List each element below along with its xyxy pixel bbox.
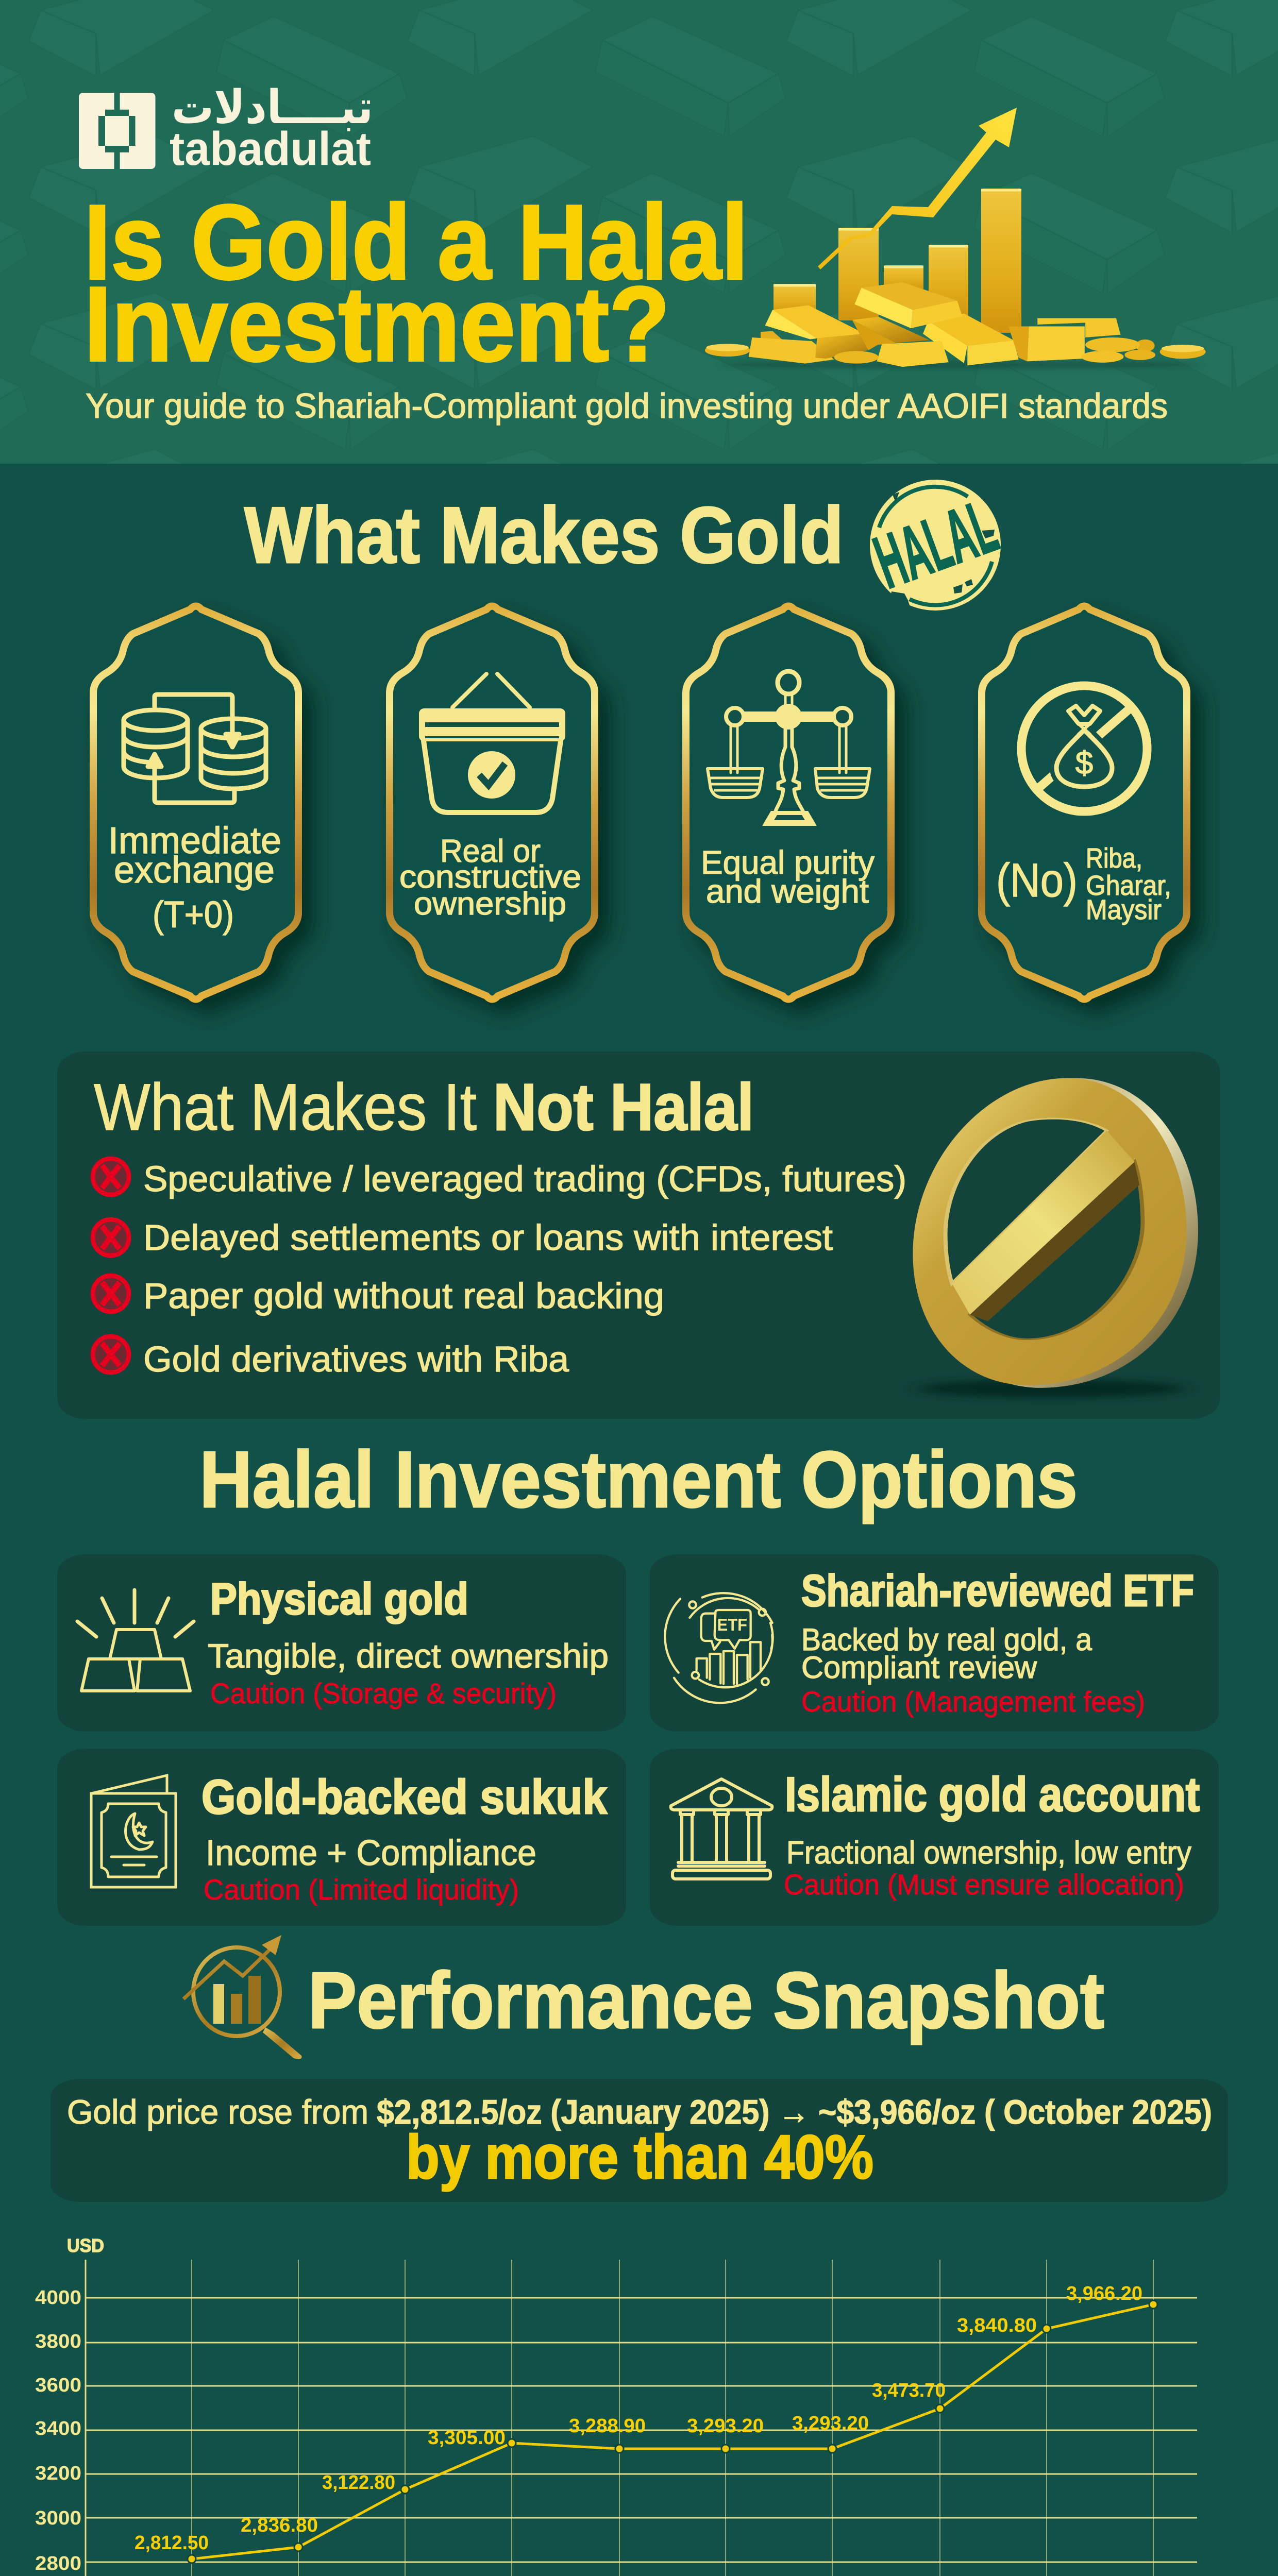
y axis labels: 3800 [35, 2331, 81, 2352]
card text: (T+0) [153, 894, 234, 936]
data labels: 3,305.00 [428, 2427, 506, 2449]
list item 3: Paper gold without real backing [143, 1276, 664, 1316]
icon: ETF circuit: ETF [717, 1616, 747, 1635]
y axis title: USD [67, 2235, 104, 2256]
option text [201, 1770, 608, 1906]
data labels: 2,836.80 [241, 2515, 318, 2536]
panel: physical gold [57, 1554, 626, 1732]
panel: card real ownership [390, 606, 595, 999]
heading: performance snapshot: Performance Snapshot [308, 1956, 1104, 2045]
icon: balance scale [708, 671, 870, 826]
option text: Fractional ownership, low entry [786, 1835, 1191, 1871]
data labels: 3,122.80 [322, 2472, 395, 2494]
card text: Riba, [1086, 843, 1142, 874]
data labels: 3,288.90 [569, 2415, 646, 2437]
card text: Immediate [108, 820, 281, 861]
icon: halal stamp: HALAL [864, 484, 1007, 604]
option text: Caution (Management fees) [801, 1685, 1145, 1718]
data labels: 3,293.20 [792, 2413, 869, 2434]
gold bars standing [773, 189, 1021, 333]
icon: magnifier with chart [183, 1935, 301, 2059]
card text: Maysir [1086, 894, 1162, 925]
data labels [134, 2283, 1142, 2554]
card text [399, 834, 581, 922]
heading: performance snapshot [183, 1935, 1104, 2059]
stat sentence: Gold price rose from [67, 2093, 368, 2131]
icon: basket with check [419, 674, 565, 812]
panel: what makes it not halal [57, 1052, 1220, 1419]
heading: What Makes Gold: What Makes Gold [244, 490, 844, 580]
list item 4: Gold derivatives with Riba [143, 1339, 569, 1379]
panel: card no riba [982, 606, 1187, 999]
price line [192, 2304, 1153, 2559]
panel: card immediate exchange [93, 606, 298, 999]
option text: Gold-backed sukuk [201, 1770, 608, 1824]
icon: 3D gold prohibition sign [913, 1078, 1198, 1398]
option text: Shariah-reviewed ETF [801, 1566, 1194, 1616]
data labels: 3,473.70 [872, 2380, 946, 2401]
icon: coin stacks exchange [124, 694, 266, 803]
heading: halal investment options: Halal Investment Options [199, 1435, 1078, 1524]
data labels: 3,966.20 [1066, 2283, 1142, 2304]
option text: Tangible, direct ownership [208, 1637, 609, 1675]
card text [108, 820, 281, 936]
option text: Physical gold [210, 1574, 468, 1624]
option text [784, 1767, 1200, 1901]
panel: islamic gold account [650, 1749, 1219, 1926]
subtitle: Your guide to Shariah-Compliant gold investing under AAOIFI standards [86, 386, 1168, 426]
panel: card equal purity [686, 606, 891, 999]
y axis labels: 2800 [35, 2553, 81, 2574]
logo Arabic wordmark: تبــــادلات [172, 80, 373, 134]
panel heading [94, 1071, 754, 1144]
header band [0, 0, 1278, 464]
card text: ownership [414, 886, 566, 922]
y axis labels: 3200 [35, 2463, 81, 2484]
data labels: 3,293.20 [687, 2415, 764, 2437]
y axis labels: 3000 [35, 2507, 81, 2529]
card text: exchange [114, 850, 275, 891]
gold pile [705, 282, 1206, 369]
icon: crossed money bag [1021, 686, 1147, 811]
option text: Islamic gold account [785, 1767, 1200, 1821]
option text: Backed by real gold, a [801, 1622, 1092, 1657]
panel heading: What Makes It [94, 1071, 477, 1144]
card text [701, 844, 875, 910]
panel: gold price stat [51, 2079, 1228, 2202]
option text: Caution (Storage & security) [210, 1677, 557, 1709]
option text: Income + Compliance [206, 1833, 536, 1873]
card text [996, 843, 1171, 925]
y axis labels: 3600 [35, 2375, 81, 2396]
list item 2: Delayed settlements or loans with interest [143, 1217, 833, 1258]
card text: (No) [996, 854, 1078, 907]
panel heading: Not Halal [493, 1071, 754, 1144]
y axis labels: 4000 [35, 2287, 81, 2309]
icon: crossed money bag: $ [1075, 745, 1093, 781]
stat highlight: by more than 40% [406, 2123, 873, 2192]
rising arrow [818, 108, 1017, 269]
option text [208, 1574, 609, 1709]
title: Is Gold a Halal [84, 183, 748, 301]
y axis labels [35, 2287, 81, 2574]
stat sentence [67, 2093, 1212, 2131]
stat sentence: $2,812.5/oz (January 2025) → ~$3,966/oz ( October 2025) [377, 2093, 1212, 2131]
option text: Caution (Limited liquidity) [204, 1873, 519, 1906]
list item 1: Speculative / leveraged trading (CFDs, futures) [143, 1159, 906, 1199]
icon: ETF circuit [665, 1593, 773, 1703]
panel: gold-backed sukuk [57, 1749, 626, 1926]
line chart: gold price 2025 [35, 2235, 1247, 2576]
title: Investment? [84, 265, 670, 383]
card text: constructive [399, 859, 581, 895]
option text: Compliant review [801, 1650, 1037, 1685]
card text: Equal purity [701, 844, 875, 881]
card text: and weight [706, 873, 869, 910]
title [84, 183, 748, 383]
logo mark [79, 93, 156, 169]
y axis labels: 3400 [35, 2418, 81, 2439]
logo Latin wordmark: tabadulat [170, 123, 371, 175]
option text [801, 1566, 1194, 1718]
icon: sukuk certificate [91, 1775, 176, 1887]
icon: gold bars with rays [77, 1590, 194, 1691]
option text: Caution (Must ensure allocation) [784, 1868, 1184, 1901]
data points [188, 2300, 1157, 2563]
icon: halal stamp [864, 480, 1007, 611]
icon: bank building [671, 1779, 772, 1879]
card text: Real or [440, 834, 541, 869]
gridlines [192, 2260, 1153, 2576]
logo: tabadulat [79, 80, 373, 175]
data labels: 2,812.50 [134, 2532, 209, 2554]
panel: shariah-reviewed ETF [650, 1554, 1219, 1732]
data labels: 3,840.80 [957, 2315, 1037, 2336]
card text: Gharar, [1086, 870, 1171, 901]
illustration: gold bars and rising arrow [705, 108, 1206, 369]
